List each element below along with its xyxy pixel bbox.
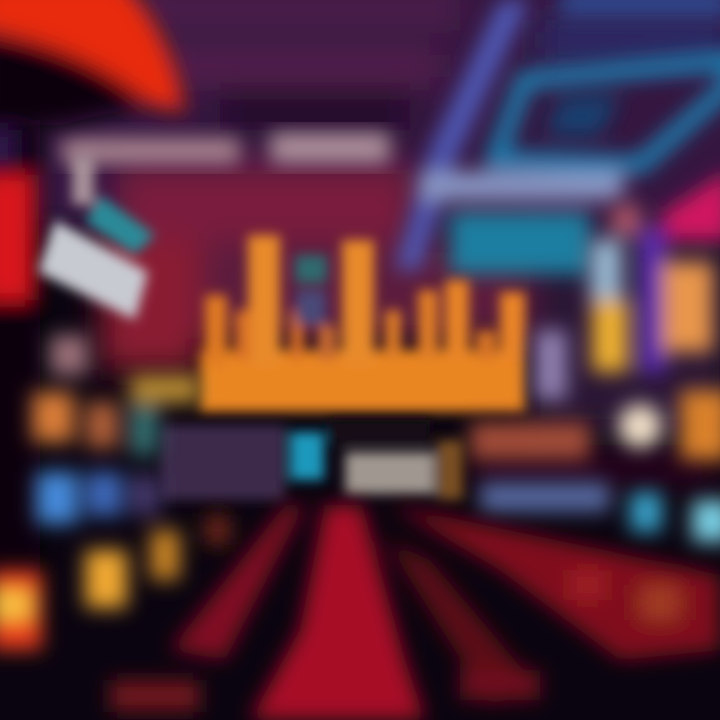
centre entrance [160,420,463,500]
ceiling beams and lattice [395,0,720,274]
hanging white sign [38,155,155,320]
orange marquee skyline [200,235,525,412]
left wall slot machines [0,335,230,650]
signs on the upper wall [62,132,390,164]
left pillar [0,120,40,580]
top-left red canopy [0,0,185,125]
right wall slot machines [535,170,720,400]
lower right machines [470,390,720,542]
ceiling and back wall [0,0,720,480]
red carpet and seating rows [110,505,720,720]
